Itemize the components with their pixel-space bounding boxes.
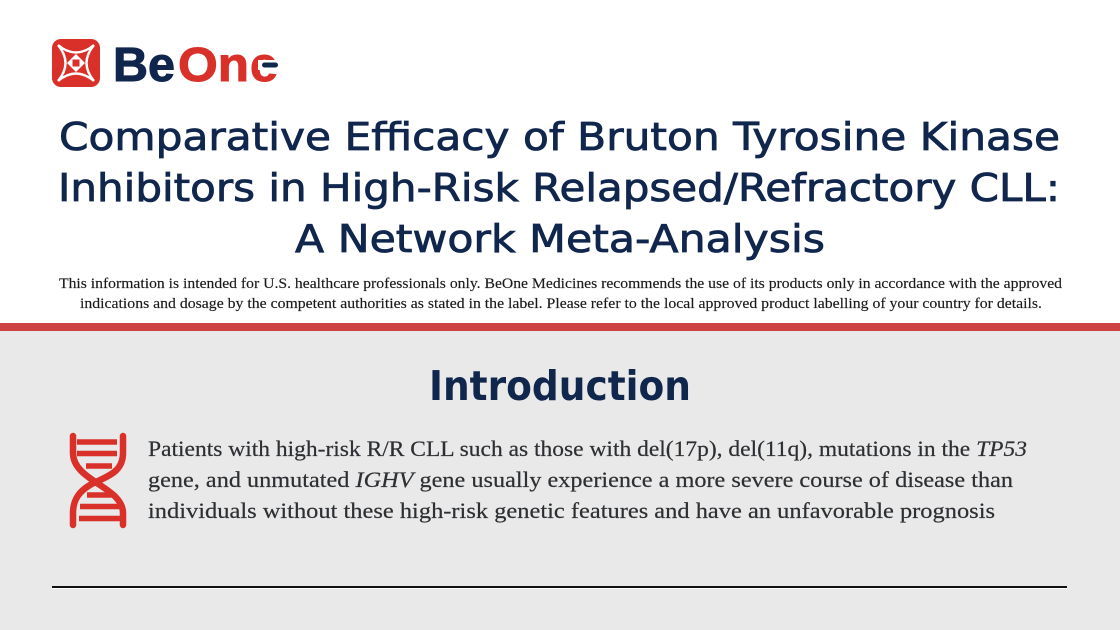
logo: BeOne: e	[250, 39, 278, 92]
disclaimer text: This information is intended for U.S. healthcare professionals only. BeOne Medicines recommends the use of its products only in accordance with the approved	[59, 276, 1063, 292]
icon: DNA helix	[73, 436, 123, 525]
logo: BeOne: On	[178, 39, 249, 92]
introduction body text: Patients with high-risk R/R CLL such as those with del(17p), del(11q), mutations in the TP53	[148, 436, 1027, 461]
title: Comparative Efficacy of Bruton Tyrosine Kinase	[59, 115, 1060, 159]
red divider bar	[0, 323, 1120, 331]
title	[58, 115, 1060, 261]
title: A Network Meta-Analysis	[295, 217, 825, 261]
title: Inhibitors in High-Risk Relapsed/Refractory CLL:	[58, 166, 1060, 210]
introduction body text: gene, and unmutated IGHV gene usually experience a more severe course of disease than	[148, 467, 1013, 492]
disclaimer text: indications and dosage by the competent authorities as stated in the label. Please refer to the local approved product labelling of your country for details.	[80, 296, 1042, 312]
heading: Introduction: Introduction	[429, 362, 691, 410]
logo wordmark: Be	[113, 39, 175, 92]
panel: introduction	[0, 323, 1120, 630]
disclaimer text	[59, 276, 1063, 312]
logo: BeOne	[52, 39, 280, 92]
icon: logo mark	[52, 39, 100, 87]
introduction body text: individuals without these high-risk genetic features and have an unfavorable prognosis	[148, 498, 995, 523]
introduction body text	[148, 436, 1027, 523]
